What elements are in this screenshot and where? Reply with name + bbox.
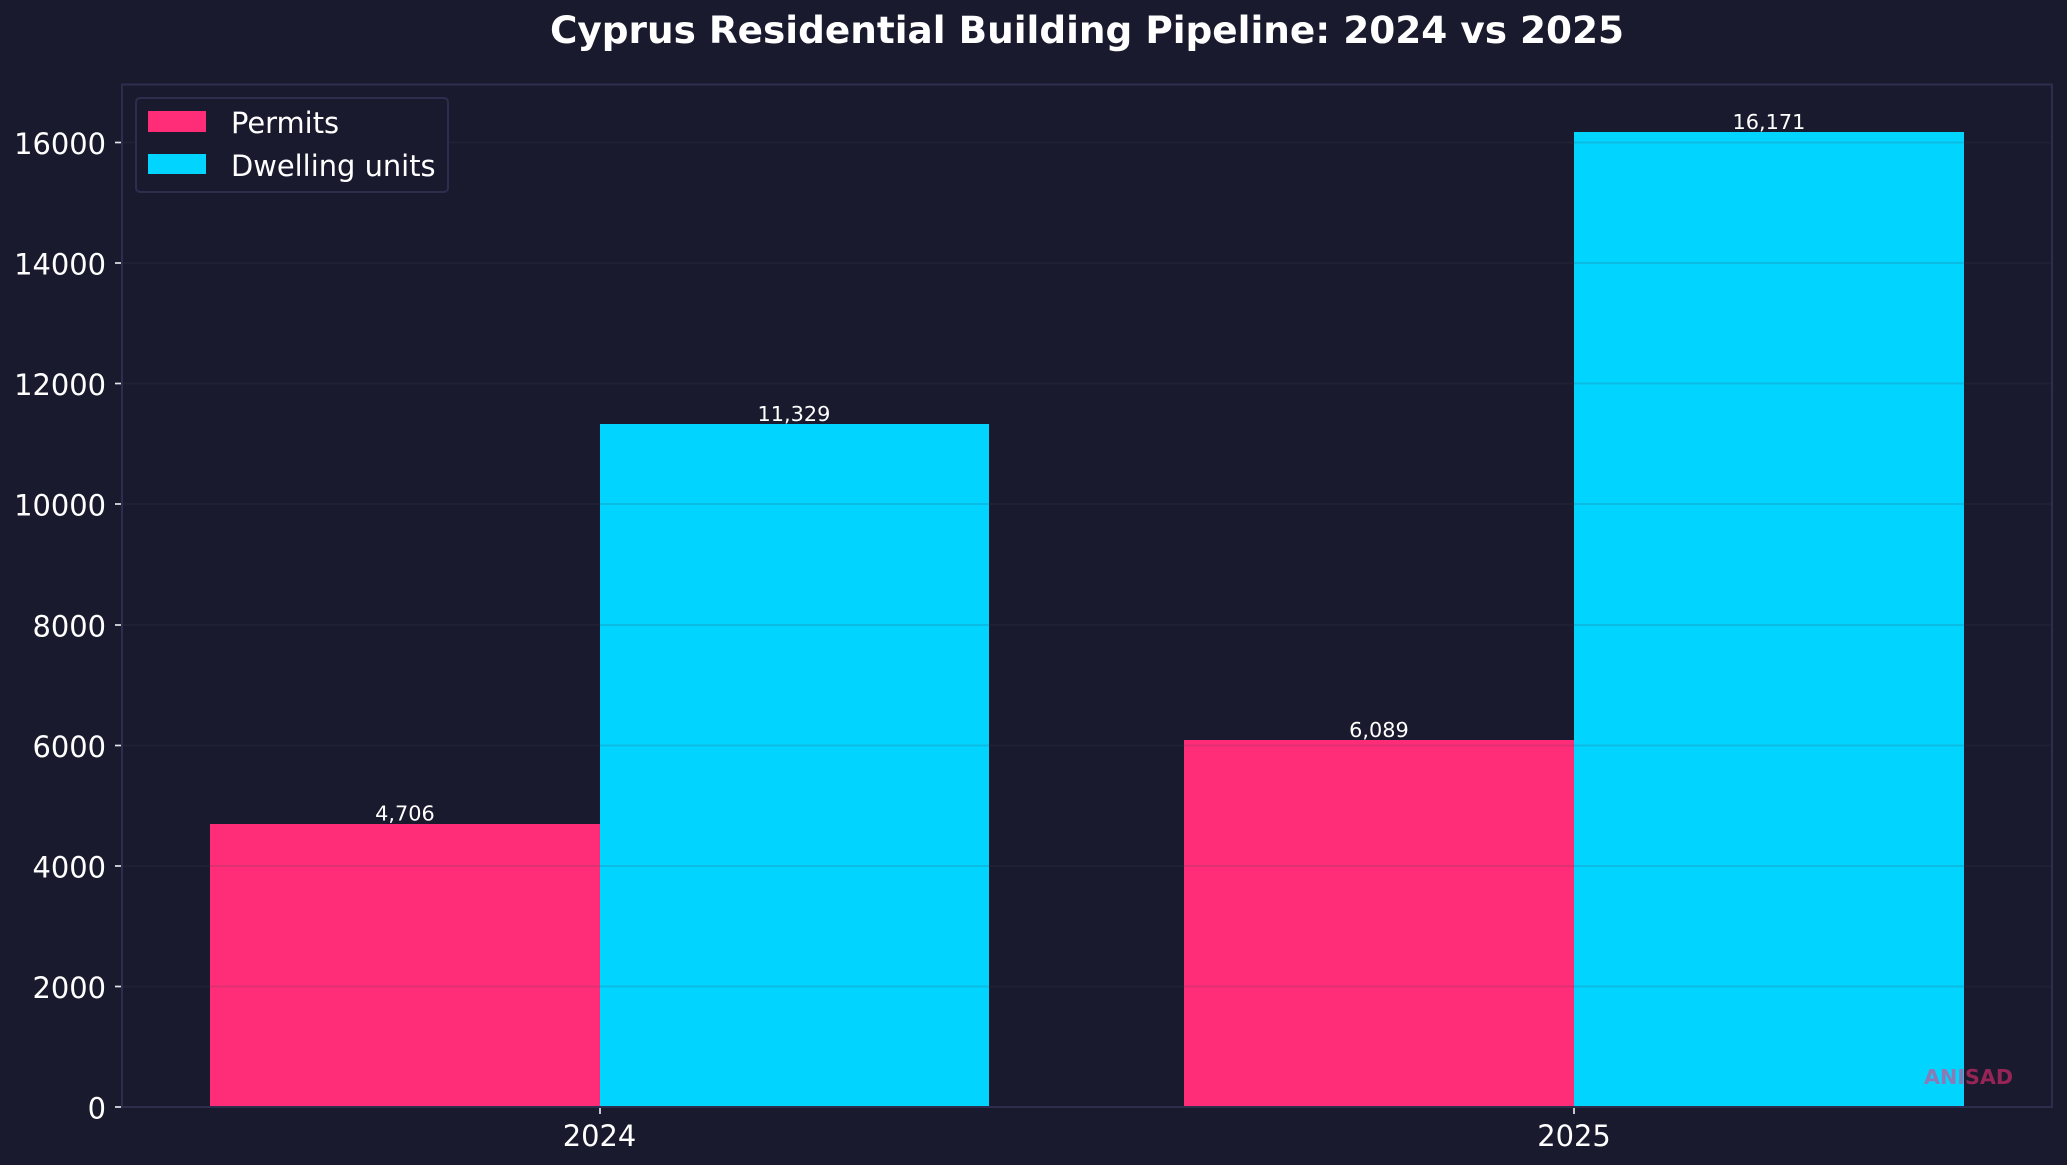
y axis labels: 10000 [14,488,106,522]
watermark: ANISAD [1924,1065,2013,1089]
y axis labels: 0 [88,1092,106,1126]
value labels: 6,089 [1349,718,1409,742]
title: Cyprus Residential Building Pipeline: 2024 vs 2025 [550,8,1624,52]
bars: 2025 dwelling units [1574,132,1964,1107]
value labels: 4,706 [375,802,435,826]
legend label: dwelling units: Dwelling units [231,149,436,183]
y axis labels: 6000 [32,730,106,764]
legend [136,98,448,192]
value labels: 11,329 [758,402,830,426]
bars: 2024 dwelling units [600,424,989,1107]
legend label: permits: Permits [231,106,339,140]
y axis labels: 4000 [32,851,106,885]
bars: 2025 permits [1184,740,1574,1107]
legend swatch: dwelling units [148,154,206,174]
y axis labels: 2000 [32,971,106,1005]
y axis labels: 14000 [14,248,106,282]
legend swatch: permits [148,111,206,132]
value labels: 16,171 [1733,110,1805,134]
x axis labels [563,1119,1611,1153]
y axis labels: 16000 [14,127,106,161]
y axis labels: 8000 [32,610,106,644]
bars: 2024 permits [210,824,600,1107]
y axis labels [14,127,106,1126]
x axis labels: 2024 [563,1119,636,1153]
x axis labels: 2025 [1537,1119,1611,1153]
value labels [375,110,1805,826]
y axis labels: 12000 [14,368,106,402]
